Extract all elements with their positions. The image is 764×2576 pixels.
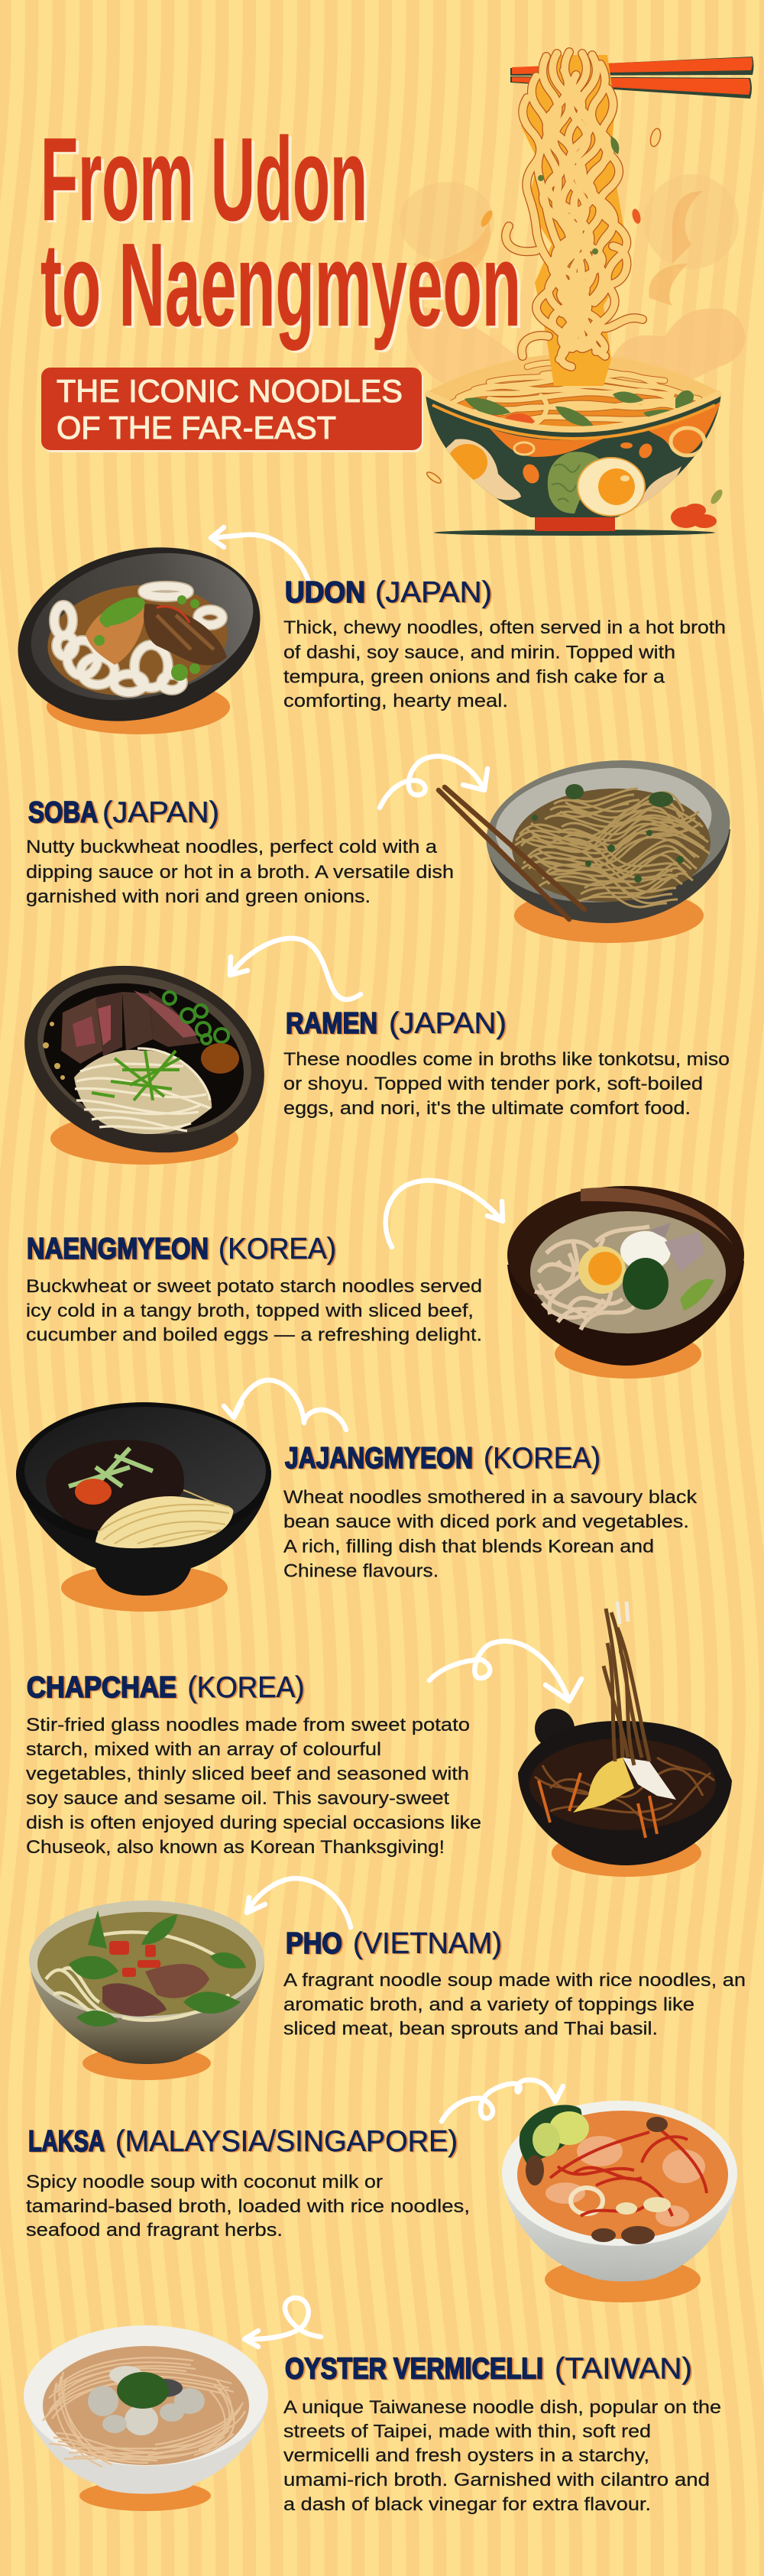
- icon: lifted noodles: [506, 52, 643, 386]
- description: Buckwheat or sweet potato starch noodles served: [26, 1276, 482, 1297]
- description: streets of Taipei, made with thin, soft red: [283, 2421, 651, 2442]
- heading: SOBA: [28, 796, 98, 829]
- icon: naengmyeon bowl: [507, 1186, 744, 1366]
- arrow: [211, 527, 309, 584]
- heading: (JAPAN): [389, 1007, 507, 1040]
- heading: [27, 1671, 304, 1704]
- description: Chinese flavours.: [283, 1560, 439, 1582]
- heading: (MALAYSIA/SINGAPORE): [115, 2125, 458, 2158]
- description: soy sauce and sesame oil. This savoury-sweet: [26, 1788, 449, 1809]
- description: umami-rich broth. Garnished with cilantro and: [283, 2470, 710, 2490]
- bowl shadow: [79, 2480, 211, 2511]
- arrow: [386, 1181, 503, 1247]
- icon: soup greens: [465, 390, 694, 426]
- panel: jajangmyeon: [16, 1380, 698, 1612]
- panel: pho: [29, 1878, 746, 2080]
- icon: pho bowl: [29, 1900, 264, 2064]
- heading: (JAPAN): [375, 576, 492, 609]
- description: [26, 1715, 481, 1858]
- bowl shadow: [61, 1564, 228, 1612]
- icon: floating noodle bits: [426, 128, 724, 506]
- panel: chapchae: [26, 1602, 732, 1877]
- description: sliced meat, bean sprouts and Thai basil.: [283, 2019, 658, 2039]
- description: These noodles come in broths like tonkotsu, miso: [283, 1049, 730, 1070]
- subtitle banner: THE ICONIC NOODLES: [57, 373, 403, 409]
- arrow: [247, 1878, 351, 1927]
- description: Spicy noodle soup with coconut milk or: [26, 2172, 383, 2192]
- description: tempura, green onions and fish cake for a: [283, 666, 665, 688]
- heading: (TAIWAN): [555, 2352, 692, 2386]
- description: comforting, hearty meal.: [283, 691, 508, 711]
- heading: PHO: [286, 1927, 342, 1960]
- description: vegetables, thinly sliced beef and seasoned with: [26, 1764, 469, 1784]
- heading: UDON: [285, 576, 365, 609]
- description: icy cold in a tangy broth, topped with sliced beef,: [26, 1301, 474, 1321]
- title: [40, 113, 521, 351]
- heading: [286, 1007, 507, 1040]
- icon: chopsticks: [510, 57, 753, 99]
- heading: (KOREA): [484, 1442, 601, 1475]
- hero steam clouds: [400, 174, 745, 390]
- description: vermicelli and fresh oysters in a starchy,: [283, 2445, 649, 2466]
- icon: jajangmyeon bowl: [16, 1402, 271, 1596]
- icon: bowl body: [426, 393, 721, 531]
- panel: udon: [0, 523, 726, 746]
- bowl shadow: [50, 1113, 238, 1165]
- heading: LAKSA: [28, 2125, 105, 2158]
- description: tamarind-based broth, loaded with rice noodles,: [26, 2196, 470, 2217]
- arrow: [442, 2080, 563, 2121]
- description: [26, 837, 454, 907]
- heading: NAENGMYEON: [27, 1233, 209, 1265]
- description: eggs, and nori, it's the ultimate comfort food.: [283, 1098, 691, 1119]
- bowl shadow: [83, 2046, 211, 2080]
- heading: (VIETNAM): [353, 1927, 502, 1960]
- heading: OYSTER VERMICELLI: [285, 2352, 543, 2386]
- heading: [285, 576, 492, 609]
- icon: chopsticks: [439, 787, 584, 919]
- description: Thick, chewy noodles, often served in a hot broth: [283, 617, 726, 638]
- description: dipping sauce or hot in a broth. A versatile dish: [26, 862, 454, 883]
- description: Chuseok, also known as Korean Thanksgiving!: [26, 1837, 445, 1858]
- bowl shadow: [545, 2257, 701, 2302]
- description: [283, 2397, 721, 2515]
- description: or shoyu. Topped with tender pork, soft-boiled: [283, 1074, 703, 1094]
- subtitle banner: OF THE FAR-EAST: [57, 410, 336, 446]
- description: [26, 1276, 482, 1345]
- description: [283, 617, 726, 711]
- description: A rich, filling dish that blends Korean and: [283, 1536, 654, 1557]
- description: starch, mixed with an array of colourful: [26, 1739, 381, 1760]
- description: garnished with nori and green onions.: [26, 886, 371, 907]
- title: From Udon: [40, 113, 367, 245]
- arrow: [224, 1380, 346, 1430]
- bowl shadow: [552, 1829, 701, 1877]
- description: [26, 2172, 470, 2241]
- description: Stir-fried glass noodles made from sweet potato: [26, 1715, 470, 1735]
- heading: [28, 796, 219, 829]
- panel: laksa: [26, 2080, 737, 2302]
- icon: table shadow: [434, 530, 715, 536]
- description: Wheat noodles smothered in a savoury black: [283, 1487, 698, 1508]
- heading: (KOREA): [219, 1233, 336, 1265]
- description: A unique Taiwanese noodle dish, popular on the: [283, 2397, 721, 2418]
- heading: (JAPAN): [102, 796, 219, 829]
- hero illustration: noodle bowl and chopsticks: [426, 52, 753, 536]
- icon: udon bowl: [0, 523, 279, 746]
- description: Nutty buckwheat noodles, perfect cold with a: [26, 837, 438, 857]
- description: a dash of black vinegar for extra flavour.: [283, 2494, 651, 2515]
- description: cucumber and boiled eggs — a refreshing delight.: [26, 1325, 482, 1345]
- icon: oyster vermicelli bowl: [24, 2325, 268, 2494]
- description: aromatic broth, and a variety of toppings like: [283, 1994, 694, 2015]
- panel: naengmyeon: [26, 1181, 744, 1379]
- panel: ramen: [1, 937, 730, 1181]
- heading: (KOREA): [188, 1671, 304, 1704]
- bowl shadow: [47, 679, 230, 734]
- description: A fragrant noodle soup made with rice noodles, an: [283, 1970, 746, 1991]
- arrow: [380, 757, 487, 808]
- bowl shadow: [555, 1330, 701, 1379]
- icon: red garnish: [671, 504, 717, 528]
- heading: CHAPCHAE: [27, 1671, 176, 1704]
- icon: laksa bowl: [502, 2101, 737, 2282]
- subtitle banner: [41, 368, 423, 452]
- heading: RAMEN: [286, 1007, 377, 1040]
- arrow: [230, 938, 361, 1000]
- description: seafood and fragrant herbs.: [26, 2220, 283, 2241]
- icon: chapchae pan: [518, 1602, 732, 1865]
- panel: oyster vermicelli: [24, 2298, 721, 2515]
- arrow: [244, 2298, 321, 2347]
- heading: JAJANGMYEON: [285, 1442, 473, 1475]
- heading: [286, 1927, 502, 1960]
- description: dish is often enjoyed during special occasions like: [26, 1813, 481, 1833]
- description: [283, 1049, 730, 1119]
- icon: soba bowl: [479, 749, 737, 923]
- arrow: [429, 1641, 581, 1701]
- description: of dashi, soy sauce, and mirin. Topped with: [283, 642, 675, 663]
- description: [283, 1970, 746, 2039]
- description: bean sauce with diced pork and vegetables.: [283, 1512, 689, 1532]
- icon: bowl back and soup: [426, 354, 721, 429]
- bowl shadow: [514, 888, 704, 943]
- description: [283, 1487, 698, 1582]
- icon: ramen bowl: [1, 937, 288, 1181]
- panel: soba: [26, 749, 737, 943]
